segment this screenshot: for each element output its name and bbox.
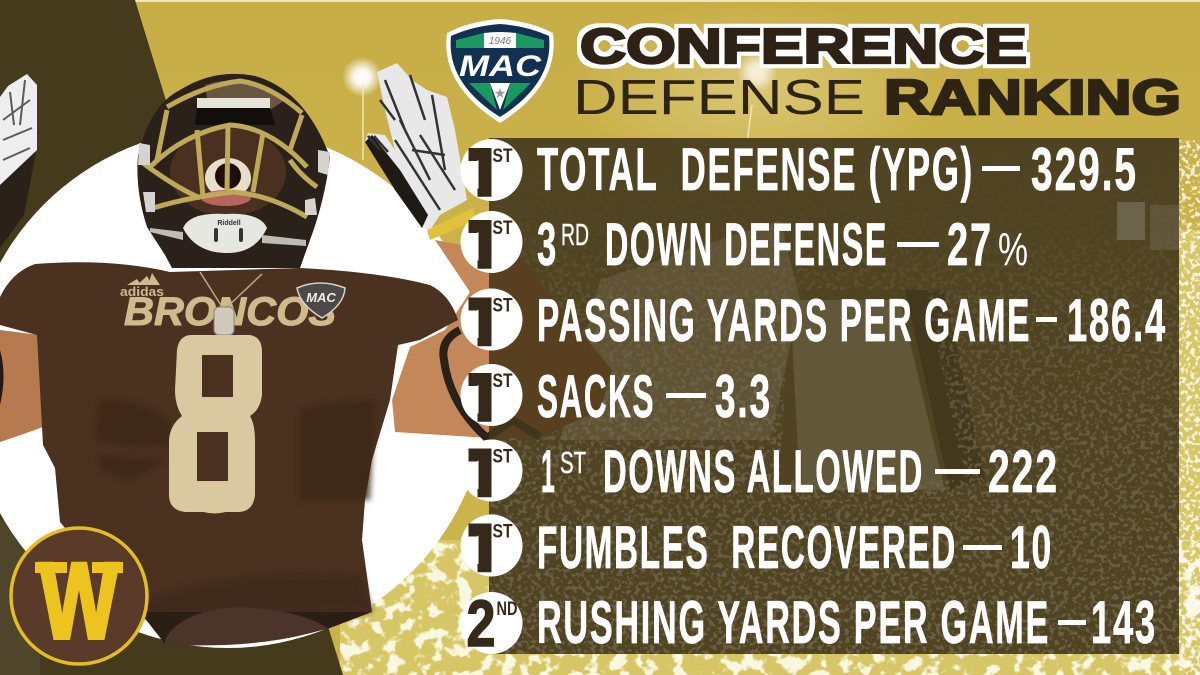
dark brown diagonal panel [0, 0, 343, 675]
badge [460, 514, 522, 576]
title line: conference: CONFERENCE [580, 20, 1027, 74]
badge: ST [492, 296, 513, 316]
MAC conference shield logo: MAC [459, 50, 543, 83]
Western Michigan W logo: W [40, 540, 118, 661]
badge: ST [492, 446, 513, 468]
badge: 1 [464, 208, 501, 282]
face [170, 128, 286, 216]
adidas mark: adidas [120, 284, 164, 299]
right glove [365, 63, 476, 240]
title line: ranking: RANKING [884, 71, 1181, 125]
right arm [392, 240, 489, 438]
MAC patch [297, 283, 345, 318]
stat row 5: 1 [541, 438, 556, 505]
ranking panel overlay [489, 138, 1179, 654]
jersey [0, 262, 458, 618]
stat row 6 [460, 514, 1050, 576]
white circle behind player [0, 128, 488, 648]
MAC conference shield logo [446, 19, 554, 123]
MAC conference shield logo: ★ [494, 86, 506, 102]
stadium light [342, 52, 777, 180]
stat row 5: DOWNS ALLOWED [603, 438, 924, 505]
left forearm and glove [0, 74, 37, 248]
stat row 7 [460, 586, 1157, 660]
badge: 1 [464, 136, 501, 210]
jersey number [169, 285, 262, 564]
title line: defense: DEFENSE [573, 71, 865, 125]
helmet side clips [138, 143, 330, 215]
badge: 1 [464, 361, 501, 435]
jersey number: 8 [172, 285, 257, 564]
badge [460, 364, 522, 426]
badge: 1 [464, 436, 501, 510]
adidas mark [120, 273, 164, 299]
background: crowd at bottom [340, 140, 1200, 675]
badge: ND [496, 599, 518, 620]
stat row 1: 329.5 [1031, 136, 1138, 203]
player photo [0, 63, 612, 645]
badge [460, 586, 522, 660]
stat row 7: 143 [1091, 589, 1157, 656]
stat row 2: 27 [947, 211, 993, 278]
badge [460, 211, 522, 273]
badge: 2 [466, 586, 496, 660]
badge: 1 [464, 286, 501, 360]
stat row 3 [460, 288, 1166, 350]
stat row 5 [467, 440, 1056, 502]
stadium photo under ranking panel [489, 138, 1179, 654]
Western Michigan W logo [11, 528, 147, 664]
stat row 2 [460, 211, 1027, 273]
stat row 5: ST [560, 445, 586, 480]
arm band [443, 330, 540, 438]
left arm [0, 330, 48, 442]
chin strap [183, 214, 267, 253]
stat row 4: 3.3 [715, 363, 772, 430]
MAC patch: MAC [306, 290, 336, 305]
badge [467, 440, 522, 502]
badge: ST [492, 371, 513, 392]
badge [460, 288, 522, 350]
stat row 4 [460, 364, 769, 426]
dog tag [200, 272, 262, 335]
stat row 2: DOWN DEFENSE [605, 211, 888, 278]
badge: ST [492, 522, 513, 542]
stat row 6: 10 [1010, 514, 1053, 581]
badge [460, 139, 522, 201]
facemask [143, 81, 317, 217]
badge: ST [492, 146, 513, 167]
label: 3 [537, 211, 558, 278]
badge: ST [492, 218, 513, 239]
helmet: Riddell [217, 220, 241, 227]
helmet [137, 74, 330, 268]
MAC conference shield logo: 1946 [489, 36, 512, 47]
jersey wordmark: BRONCOS [124, 290, 336, 334]
stat row 1 [460, 139, 1136, 203]
stat row 5: 222 [988, 438, 1059, 505]
label: SACKS [537, 363, 655, 430]
pants [140, 612, 372, 645]
badge: 1 [464, 512, 501, 586]
stat row 2: RD [561, 217, 589, 252]
title [573, 20, 1181, 125]
stat row 2: % [998, 223, 1028, 275]
